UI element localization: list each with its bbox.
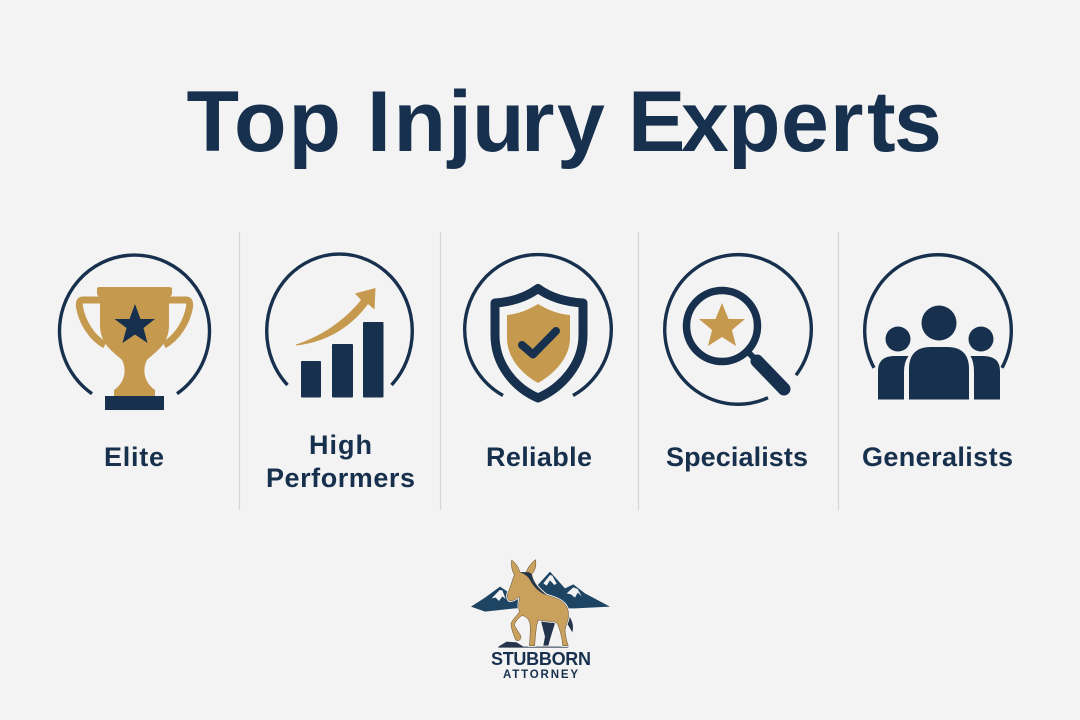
logo: Stubborn Attorney [471, 560, 610, 681]
label: Reliable: Reliable [486, 442, 592, 472]
label: High Performers: Performers [266, 463, 415, 493]
title: Top Injury Experts [186, 74, 942, 170]
label: Elite: Elite [104, 442, 164, 472]
icon: donkey [498, 560, 573, 648]
logo text: ATTORNEY: ATTORNEY [503, 669, 578, 681]
panel: Generalists [862, 255, 1013, 472]
panel: Specialists [665, 255, 811, 472]
icon: shield with check [465, 255, 611, 398]
logo text: STUBBORN: STUBBORN [491, 649, 591, 669]
label: Generalists: Generalists [862, 442, 1013, 472]
label: High Performers [266, 430, 415, 493]
icon: trophy [60, 255, 209, 410]
label: Specialists: Specialists [666, 442, 808, 472]
icon: magnifier with star [665, 255, 811, 404]
icon: mountains [471, 572, 610, 612]
label: High Performers: High [309, 430, 372, 460]
icon: bar chart with arrow [267, 254, 412, 398]
panel: Elite [60, 255, 209, 472]
icon: three people [865, 255, 1011, 400]
panel: Reliable [465, 255, 611, 472]
panel: High Performers [266, 254, 415, 493]
